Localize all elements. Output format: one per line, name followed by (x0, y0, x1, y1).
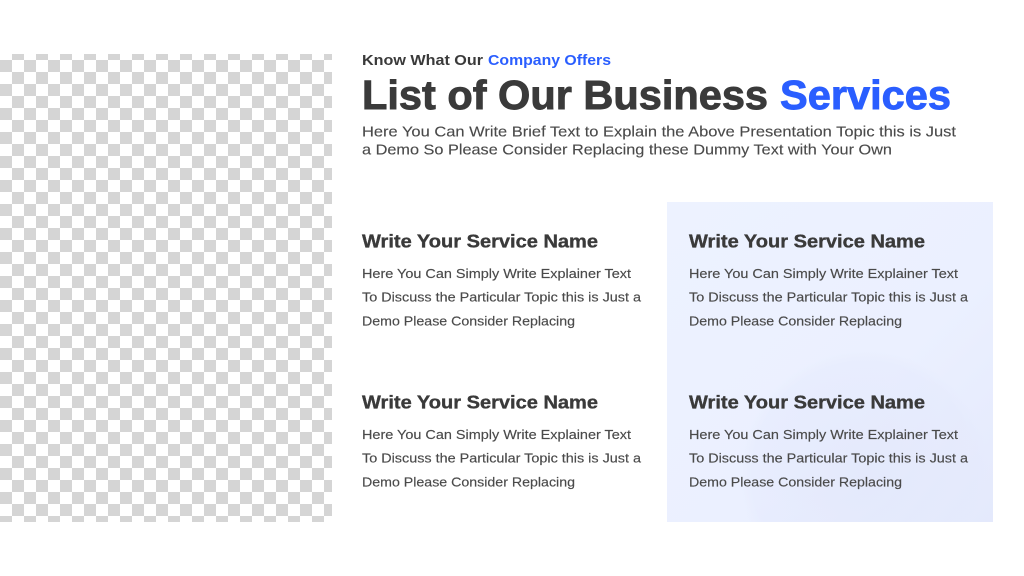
service: bottom right: Here You Can Simply Write Explainer Text (689, 428, 959, 442)
service: bottom left: Here You Can Simply Write Explainer Text (362, 428, 632, 442)
eyebrow heading: Know What Our (362, 53, 483, 69)
service: top left (362, 232, 641, 328)
intro text: Here You Can Write Brief Text to Explain the Above Presentation Topic this is Just (362, 124, 956, 140)
intro text: a Demo So Please Consider Replacing these Dummy Text with Your Own (362, 142, 892, 158)
service: bottom left: Demo Please Consider Replacing (362, 476, 575, 490)
intro text (362, 124, 956, 158)
service: top left: Write Your Service Name (362, 232, 598, 252)
service: bottom right (689, 392, 968, 490)
service: top left: To Discuss the Particular Topic this is Just a (362, 290, 641, 304)
service: bottom left: Write Your Service Name (362, 392, 598, 412)
service: top right (689, 232, 968, 328)
service: bottom left (362, 392, 641, 490)
service: top left: Demo Please Consider Replacing (362, 314, 575, 328)
image placeholder: checkerboard (0, 54, 332, 522)
service: top left: Here You Can Simply Write Explainer Text (362, 267, 632, 281)
eyebrow heading: Company Offers (488, 53, 611, 69)
service: top right: To Discuss the Particular Topic this is Just a (689, 290, 968, 304)
service: top right: Demo Please Consider Replacing (689, 314, 902, 328)
panel: highlighted services background (667, 202, 993, 522)
eyebrow heading (362, 53, 611, 69)
service: bottom right: Demo Please Consider Replacing (689, 476, 902, 490)
service: top right: Write Your Service Name (689, 232, 925, 252)
service: bottom left: To Discuss the Particular Topic this is Just a (362, 452, 641, 466)
service: bottom right: Write Your Service Name (689, 392, 925, 412)
service: top right: Here You Can Simply Write Explainer Text (689, 267, 959, 281)
title: Services (780, 72, 951, 118)
title: List of Our Business (362, 72, 768, 118)
service: bottom right: To Discuss the Particular Topic this is Just a (689, 452, 968, 466)
title (362, 72, 951, 118)
